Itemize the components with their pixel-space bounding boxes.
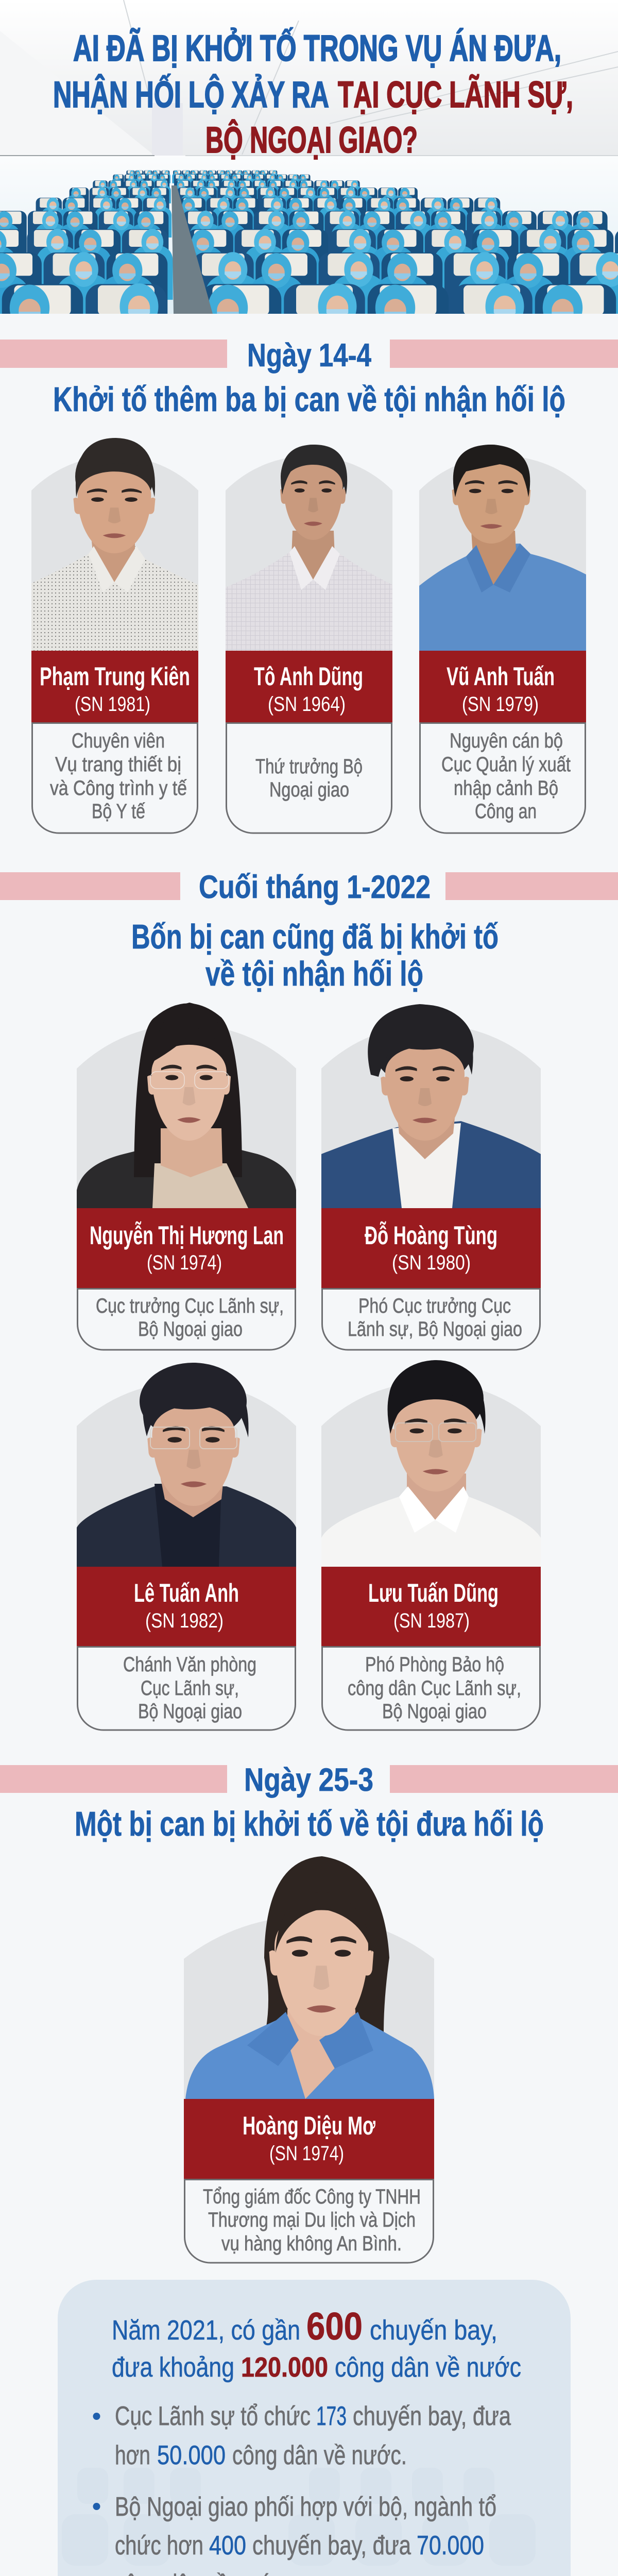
- card: Hoàng Diệu Mơ: [184, 1856, 434, 2263]
- role box: Phó Cục trưởng Cục: [358, 1295, 511, 1317]
- lead text: 120.000: [241, 2352, 328, 2383]
- name banner: Lưu Tuấn Dũng: [368, 1579, 499, 1607]
- role box: [32, 723, 198, 833]
- role box: Cục trưởng Cục Lãnh sự,: [96, 1295, 284, 1317]
- bullet: Bộ Ngoại giao: 400: [209, 2531, 246, 2561]
- portrait: Lưu Tuấn Dũng: [321, 1360, 541, 1567]
- role box: Chuyên viên: [72, 730, 165, 752]
- role box: Công an: [475, 800, 537, 823]
- card: Lưu Tuấn Dũng: [321, 1360, 541, 1730]
- name banner: Hoàng Diệu Mơ: [243, 2111, 375, 2140]
- role box: [77, 1289, 296, 1350]
- section heading: Cuối tháng 1-2022: [0, 869, 618, 993]
- section heading: Ngày 25-3: [0, 1762, 618, 1843]
- portrait: Phạm Trung Kiên: [31, 438, 198, 651]
- name banner: Vũ Anh Tuấn: [447, 662, 555, 691]
- role box: Lãnh sự, Bộ Ngoại giao: [348, 1318, 522, 1341]
- role box: vụ hàng không An Bình.: [221, 2232, 402, 2255]
- lead text: công dân về nước: [335, 2352, 521, 2383]
- bullet: Cục Lãnh sự: chuyến bay, đưa: [353, 2401, 511, 2431]
- bullet: Cục Lãnh sự: Cục Lãnh sự tổ chức: [115, 2401, 311, 2431]
- lead text: đưa khoảng: [112, 2352, 234, 2383]
- section heading: Ngày 25-3: Ngày 25-3: [244, 1762, 373, 1798]
- name banner: (SN 1979): [462, 693, 539, 716]
- name banner: (SN 1982): [145, 1609, 224, 1632]
- role box: [420, 723, 585, 833]
- portrait: Nguyễn Thị Hương Lan: [77, 1003, 296, 1208]
- panel: repatriation flights statistics: [58, 2280, 571, 2576]
- name banner: [31, 651, 198, 722]
- card: Lê Tuấn Anh: [77, 1363, 296, 1730]
- name banner: (SN 1980): [392, 1251, 471, 1274]
- role box: Nguyên cán bộ: [450, 730, 563, 752]
- role box: nhập cảnh Bộ: [454, 777, 558, 800]
- section heading: Cuối tháng 1-2022: Cuối tháng 1-2022: [199, 869, 431, 905]
- name banner: (SN 1964): [268, 693, 346, 716]
- role box: [227, 723, 391, 833]
- role box: [77, 1647, 296, 1730]
- title: NHẬN HỐI LỘ XẢY RA: [53, 74, 329, 115]
- title: [53, 28, 573, 161]
- portrait: Đỗ Hoàng Tùng: [321, 1004, 541, 1208]
- name banner: Đỗ Hoàng Tùng: [365, 1221, 497, 1250]
- role box: công dân Cục Lãnh sự,: [348, 1677, 521, 1700]
- role box: [184, 2179, 434, 2263]
- card: Nguyễn Thị Hương Lan: [77, 1003, 296, 1350]
- hero: airplane cabin photo: [0, 0, 618, 314]
- title: BỘ NGOẠI GIAO?: [205, 120, 418, 161]
- section heading: Cuối tháng 1-2022: Bốn bị can cũng đã bị khởi tố: [131, 918, 499, 956]
- lead text: 600: [306, 2304, 363, 2348]
- name banner: [77, 1208, 296, 1288]
- name banner: Tô Anh Dũng: [254, 662, 363, 691]
- role box: Bộ Y tế: [92, 800, 145, 823]
- role box: Cục Quản lý xuất: [441, 753, 571, 776]
- role box: Thứ trưởng Bộ: [255, 755, 363, 778]
- role box: Chánh Văn phòng: [123, 1653, 256, 1676]
- name banner: [184, 2099, 434, 2179]
- portrait: Vũ Anh Tuấn: [419, 445, 586, 651]
- bullet: Cục Lãnh sự: công dân về nước.: [232, 2441, 407, 2470]
- role box: Ngoại giao: [269, 778, 349, 801]
- name banner: [77, 1567, 296, 1646]
- role box: Bộ Ngoại giao: [382, 1700, 487, 1723]
- name banner: (SN 1981): [75, 693, 150, 716]
- name banner: [226, 651, 392, 722]
- portrait: Hoàng Diệu Mơ: [184, 1856, 434, 2099]
- bullet: Cục Lãnh sự: [93, 2401, 511, 2470]
- role box: Thương mại Du lịch và Dịch: [208, 2209, 416, 2231]
- name banner: [321, 1208, 541, 1288]
- role box: [322, 1647, 540, 1730]
- lead text: Năm 2021, có gần: [112, 2315, 300, 2346]
- role box: Tổng giám đốc Công ty TNHH: [203, 2185, 421, 2208]
- section heading: Cuối tháng 1-2022: về tội nhận hối lộ: [205, 955, 423, 993]
- role box: Cục Lãnh sự,: [141, 1677, 239, 1700]
- lead text: chuyến bay,: [370, 2315, 497, 2346]
- name banner: Phạm Trung Kiên: [40, 662, 190, 691]
- name banner: Nguyễn Thị Hương Lan: [90, 1221, 284, 1250]
- name banner: [321, 1567, 541, 1646]
- card: Phạm Trung Kiên: [31, 438, 198, 833]
- portrait: Tô Anh Dũng: [226, 445, 392, 651]
- lead text: [112, 2304, 521, 2383]
- role box: và Công trình y tế: [50, 777, 187, 800]
- card: Tô Anh Dũng: [226, 445, 392, 833]
- card: Vũ Anh Tuấn: [419, 445, 586, 833]
- name banner: (SN 1974): [269, 2142, 344, 2165]
- name banner: (SN 1987): [393, 1609, 470, 1632]
- section heading: Ngày 14-4: Ngày 14-4: [247, 337, 371, 374]
- bullet: Bộ Ngoại giao: 70.000: [417, 2531, 484, 2561]
- bullet: Cục Lãnh sự: 50.000: [157, 2441, 226, 2470]
- bullet: Bộ Ngoại giao: chuyến bay, đưa: [252, 2531, 411, 2561]
- bullet: Bộ Ngoại giao: [93, 2492, 496, 2576]
- section heading: Ngày 14-4: [0, 337, 618, 419]
- role box: Phó Phòng Bảo hộ: [365, 1653, 504, 1676]
- name banner: (SN 1974): [147, 1251, 222, 1274]
- bullet: Cục Lãnh sự: hơn: [115, 2441, 150, 2470]
- card: Đỗ Hoàng Tùng: [321, 1004, 541, 1350]
- bullet: Bộ Ngoại giao: Bộ Ngoại giao phối hợp với bộ, ngành tổ: [115, 2492, 496, 2522]
- bullet: Bộ Ngoại giao: chức hơn: [115, 2531, 203, 2561]
- bullet: Cục Lãnh sự: 173: [316, 2401, 347, 2431]
- role box: [322, 1289, 540, 1350]
- role box: Bộ Ngoại giao: [138, 1700, 242, 1723]
- name banner: [419, 651, 586, 722]
- role box: Bộ Ngoại giao: [138, 1318, 243, 1341]
- portrait: Lê Tuấn Anh: [77, 1363, 296, 1567]
- name banner: Lê Tuấn Anh: [134, 1579, 239, 1607]
- role box: Vụ trang thiết bị: [55, 753, 181, 776]
